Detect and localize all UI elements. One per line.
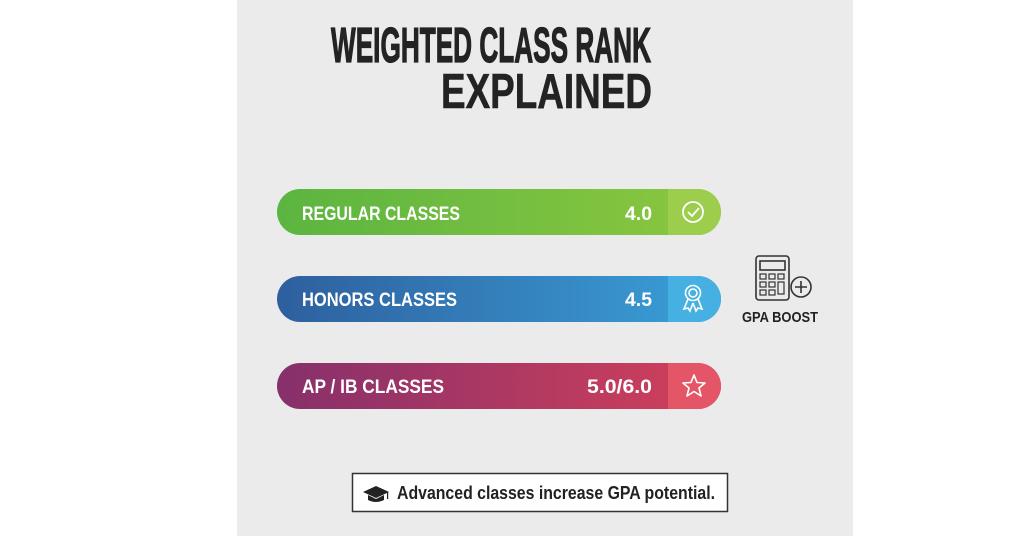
- icon: calculator GPA boost: [756, 256, 811, 300]
- icon: star: [683, 375, 705, 396]
- icon: ribbon award: [684, 286, 702, 311]
- label: GPA BOOST: GPA BOOST: [742, 309, 818, 326]
- bar: AP / IB classes: [277, 363, 728, 409]
- bar: honors classes: [277, 276, 728, 322]
- icon: graduation cap: [363, 486, 389, 502]
- callout: footer note: Advanced classes increase GPA potential.: [397, 483, 715, 503]
- bar: AP / IB classes: AP / IB CLASSES: [302, 377, 444, 398]
- panel: background: [237, 0, 853, 536]
- title: WEIGHTED CLASS RANK: [331, 19, 651, 73]
- bar: honors classes: HONORS CLASSES: [302, 290, 457, 311]
- bar: regular classes: 4.0: [625, 204, 652, 225]
- bar: regular classes: REGULAR CLASSES: [302, 204, 460, 225]
- title: [331, 19, 652, 119]
- icon: check: [683, 202, 703, 222]
- bar: honors classes: 4.5: [625, 290, 652, 311]
- title: EXPLAINED: [441, 65, 652, 119]
- callout: footer note: [352, 474, 728, 512]
- bar: AP / IB classes: 5.0/6.0: [587, 377, 652, 398]
- bar: regular classes: [277, 189, 728, 235]
